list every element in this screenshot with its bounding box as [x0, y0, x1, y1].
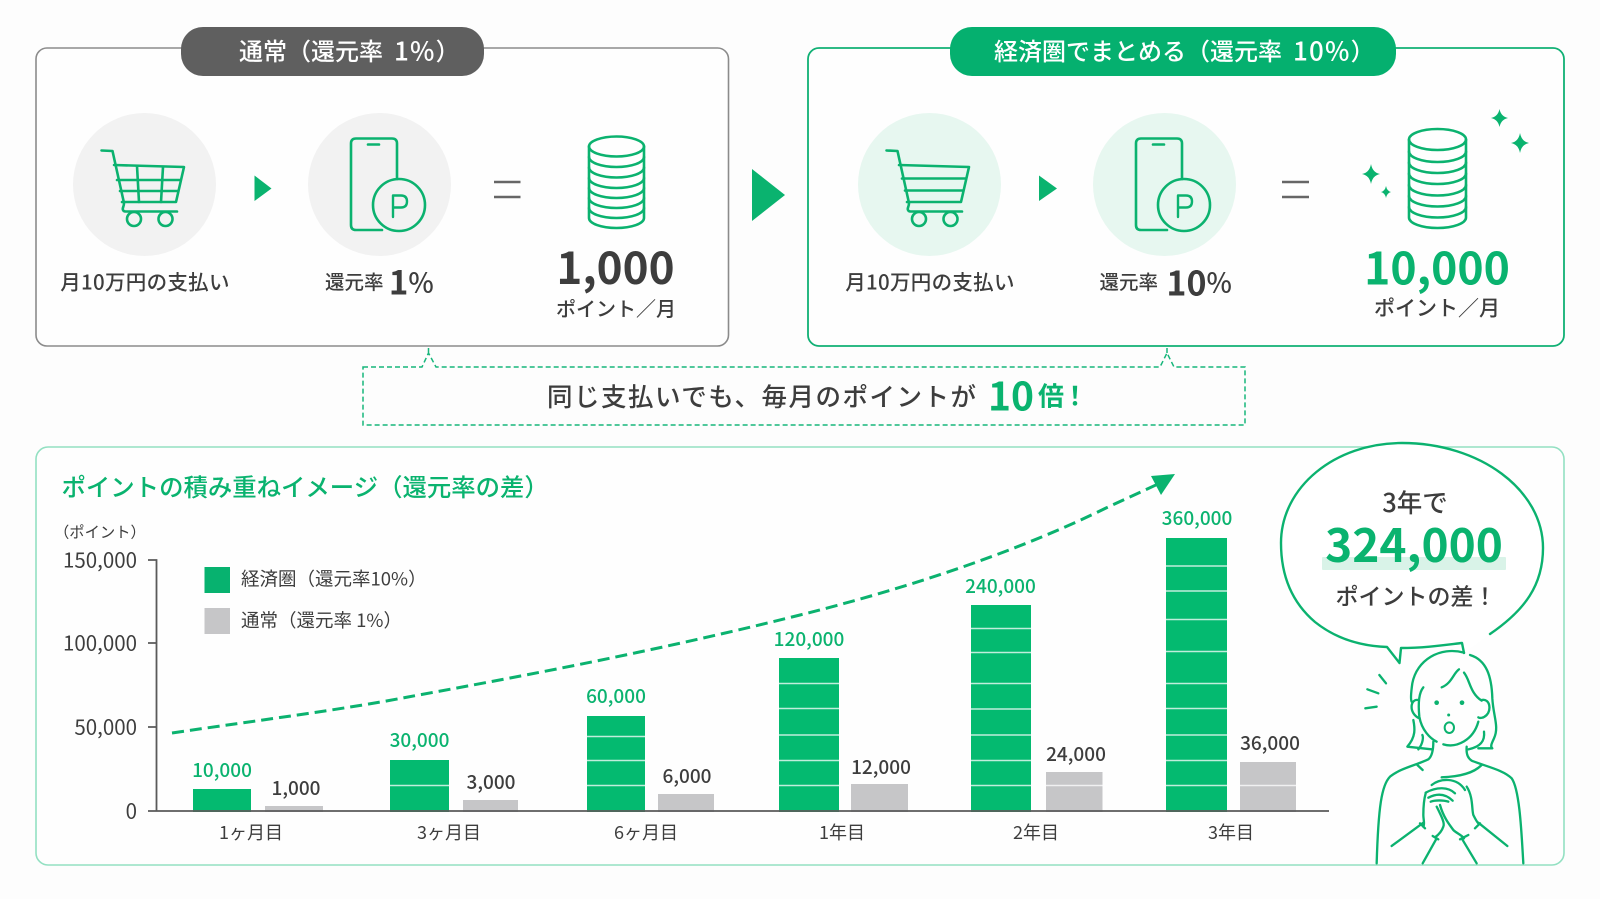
y axis labels: 150,000 [63, 544, 137, 574]
heading pill: ecosystem: 経済圏でまとめる（還元率 10%） [994, 31, 1375, 68]
y axis labels: 50,000 [74, 711, 137, 741]
axes [148, 560, 1329, 811]
callout: 10x points [363, 346, 1245, 425]
label: points per month: ポイント／月 [1374, 293, 1500, 323]
gray bars [265, 762, 1296, 812]
value labels: normal: 3,000 [467, 768, 515, 795]
icon: shopping cart [858, 113, 1001, 256]
arrow: cart to rate [254, 176, 272, 201]
panel frame: chart [36, 447, 1564, 865]
value labels: normal: 36,000 [1240, 729, 1300, 756]
panel frame: normal [36, 48, 728, 346]
equals sign [494, 182, 520, 197]
arrow: normal to ecosystem [752, 169, 785, 221]
highlight band [1322, 557, 1506, 570]
value: 1,000: 1,000 [556, 233, 675, 297]
label: monthly payment: 月10万円の支払い [845, 266, 1015, 296]
panel frame: ecosystem [808, 48, 1564, 346]
bubble outline [1281, 443, 1543, 663]
icon: coin stack [1409, 129, 1466, 228]
legend: 経済圏（還元率10%） [241, 566, 427, 592]
x axis labels: 1年目 [819, 819, 865, 845]
value labels: ecosystem: 360,000 [1162, 504, 1232, 531]
x axis labels [219, 819, 1254, 845]
bar chart [148, 538, 1329, 812]
panel: normal 1% [36, 27, 728, 346]
chart title: ポイントの積み重ねイメージ（還元率の差） [62, 469, 549, 504]
value labels: ecosystem: 60,000 [586, 682, 646, 709]
x axis labels: 1ヶ月目 [219, 819, 283, 845]
label: rate 1%: 還元率 1% [325, 257, 434, 305]
value labels: normal: 24,000 [1046, 740, 1106, 767]
callout emphasis: 10 times: 10倍！ [988, 367, 1088, 423]
value labels: normal: 6,000 [663, 762, 711, 789]
callout text: 同じ支払いでも、毎月のポイントが [547, 377, 977, 414]
heading pill: normal: 通常（還元率 1%） [239, 31, 460, 68]
icon: phone with P coin [308, 113, 451, 256]
y axis unit: （ポイント） [54, 521, 146, 543]
x axis labels: 2年目 [1013, 819, 1059, 845]
value labels: ecosystem: 10,000 [192, 756, 252, 783]
legend: 通常（還元率 1%） [241, 607, 402, 633]
label: monthly payment: 月10万円の支払い [60, 266, 230, 296]
y axis labels: 0 [126, 795, 137, 825]
y axis labels [63, 544, 137, 825]
value labels: normal: 1,000 [272, 774, 320, 801]
value labels: ecosystem: 30,000 [390, 726, 449, 753]
equals sign [1282, 182, 1309, 197]
arrow: cart to rate [1039, 176, 1057, 201]
value labels: normal [272, 729, 1300, 801]
panel: ecosystem 10% [808, 27, 1564, 346]
value: 10,000: 10,000 [1364, 233, 1510, 298]
value labels: ecosystem: 120,000 [774, 625, 844, 652]
x axis labels: 3年目 [1208, 819, 1254, 845]
bubble value: 324,000: 324,000 [1325, 510, 1503, 576]
icon: shopping cart [73, 113, 216, 256]
panel: accumulation chart [36, 443, 1564, 865]
legend [204, 566, 427, 634]
bubble text: in 3 years: 3年で [1382, 483, 1448, 520]
heading pill: ecosystem [950, 27, 1396, 76]
illustration: surprised woman [1365, 651, 1523, 863]
arrow: growth curve [172, 474, 1175, 733]
value labels: normal: 12,000 [851, 753, 911, 780]
icon: coin stack [589, 136, 644, 228]
label: points per month: ポイント／月 [556, 293, 676, 322]
label: rate 10%: 還元率 10% [1100, 256, 1232, 305]
speech bubble [1281, 443, 1543, 663]
icon: phone with P coin [1093, 113, 1236, 256]
x axis labels: 6ヶ月目 [614, 819, 678, 845]
bubble text: point difference: ポイントの差！ [1336, 578, 1496, 612]
heading pill: normal [181, 27, 484, 76]
bar separators [390, 566, 1296, 786]
value labels: ecosystem [192, 504, 1232, 783]
x axis labels: 3ヶ月目 [417, 819, 481, 845]
green bars [193, 538, 1227, 812]
callout frame [363, 346, 1245, 425]
icon: sparkles [1362, 109, 1529, 198]
y axis labels: 100,000 [63, 627, 137, 657]
value labels: ecosystem: 240,000 [965, 572, 1036, 599]
